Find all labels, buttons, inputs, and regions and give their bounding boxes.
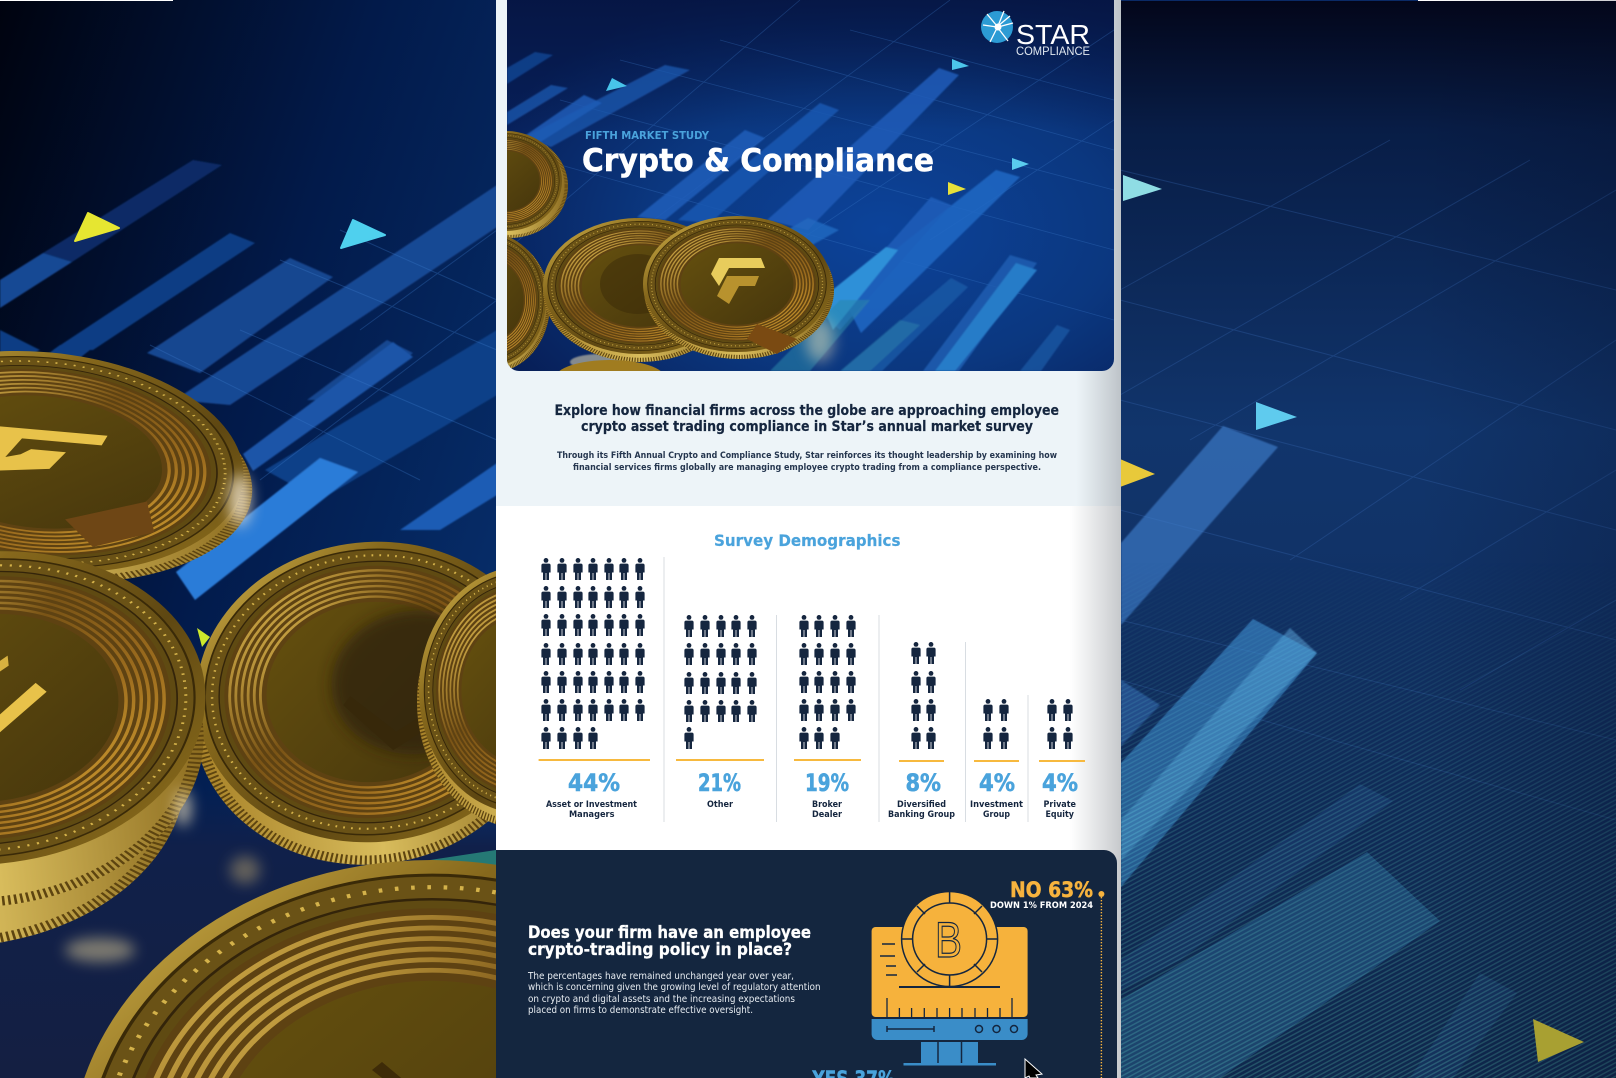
title block: FIFTH MARKET STUDY bbox=[585, 129, 710, 142]
intro heading bbox=[554, 403, 1059, 435]
column: investment group 4%: 4% bbox=[979, 769, 1015, 797]
column: investment group 4%: Group bbox=[983, 810, 1010, 820]
column: broker dealer 19% bbox=[794, 615, 861, 820]
column: investment group 4%: Investment bbox=[970, 800, 1024, 810]
column: diversified banking group 8% bbox=[888, 642, 955, 820]
coin: right small bbox=[417, 570, 496, 824]
callout: no 63%: DOWN 1% FROM 2024 bbox=[990, 901, 1093, 911]
column: broker dealer 19%: Broker bbox=[812, 800, 842, 810]
logo: Star Compliance: STAR bbox=[1016, 19, 1090, 50]
indicator: dotted line with dot bbox=[1098, 891, 1104, 1078]
coin: upper left bbox=[0, 351, 252, 580]
column: asset or investment managers 44% bbox=[539, 558, 650, 820]
panel: policy question bbox=[496, 850, 1117, 1078]
intro paragraph: financial services firms globally are managing employee crypto trading from a compliance perspective. bbox=[573, 463, 1041, 473]
hero coins bbox=[507, 131, 843, 371]
paragraph: policy commentary: which is concerning given the growing level of regulatory attention bbox=[528, 982, 820, 993]
title block bbox=[582, 129, 934, 179]
left background: gold coins bbox=[0, 351, 496, 1078]
glare: reflections under middle coin bbox=[65, 790, 260, 962]
glare: upper coin edge bbox=[229, 474, 251, 526]
column: diversified banking group 8%: Banking Group bbox=[888, 810, 955, 820]
hero chart bars bbox=[507, 52, 1070, 371]
icon: mouse cursor bbox=[1025, 1059, 1042, 1078]
panel: infographic page bbox=[496, 0, 1121, 1078]
title block: Crypto & Compliance bbox=[582, 143, 934, 179]
column: other 21%: Other bbox=[707, 800, 734, 810]
column: other 21%: 21% bbox=[698, 769, 741, 797]
intro paragraph: Through its Fifth Annual Crypto and Compliance Study, Star reinforces its thought leadership by examining how bbox=[557, 451, 1057, 461]
column: diversified banking group 8%: 8% bbox=[906, 769, 941, 797]
logo: Star Compliance bbox=[981, 11, 1090, 58]
column: asset or investment managers 44%: Managers bbox=[569, 810, 614, 820]
heading: policy question: Does your firm have an employee bbox=[528, 923, 811, 943]
chart: survey demographics pictogram bbox=[539, 557, 1085, 822]
icon: monitor with bitcoin coin: B bbox=[935, 912, 962, 968]
coin: bottom bbox=[84, 860, 496, 1078]
column: asset or investment managers 44%: Asset or Investment bbox=[546, 800, 638, 810]
column: diversified banking group 8%: Diversified bbox=[897, 800, 946, 810]
column: broker dealer 19%: Dealer bbox=[812, 810, 843, 820]
column: private equity 4%: Equity bbox=[1046, 810, 1074, 820]
paragraph: policy commentary: on crypto and digital assets and the increasing expectations bbox=[528, 994, 795, 1005]
paragraph: policy commentary bbox=[527, 971, 820, 1016]
column: investment group 4% bbox=[970, 699, 1024, 820]
right background: chart on dark blue bbox=[1120, 0, 1616, 1078]
left background: chart on dark blue bbox=[0, 0, 497, 1078]
heading: policy question: crypto-trading policy in place? bbox=[528, 940, 792, 960]
column: other 21% bbox=[676, 615, 764, 810]
coin: centre right back bbox=[200, 542, 488, 865]
intro paragraph bbox=[557, 451, 1057, 473]
heading: Survey Demographics: Survey Demographics bbox=[714, 531, 900, 550]
column: private equity 4% bbox=[1039, 699, 1085, 820]
callout: no 63% bbox=[990, 878, 1093, 911]
icon: star burst circle bbox=[981, 11, 1013, 43]
column: asset or investment managers 44%: 44% bbox=[568, 769, 620, 797]
callout: no 63%: NO 63% bbox=[1010, 878, 1093, 902]
coin: middle left bbox=[0, 551, 206, 942]
hero banner bbox=[507, 0, 1114, 371]
paragraph: policy commentary: The percentages have remained unchanged year over year, bbox=[527, 971, 794, 982]
column: private equity 4%: 4% bbox=[1042, 769, 1078, 797]
intro heading: Explore how financial firms across the globe are approaching employee bbox=[554, 403, 1059, 419]
paragraph: policy commentary: placed on firms to demonstrate effective oversight. bbox=[528, 1005, 753, 1016]
intro heading: crypto asset trading compliance in Star’s annual market survey bbox=[581, 419, 1033, 435]
heading: policy question bbox=[528, 923, 811, 960]
column: broker dealer 19%: 19% bbox=[805, 769, 849, 797]
hero triangles bbox=[606, 59, 1029, 195]
column: private equity 4%: Private bbox=[1044, 800, 1076, 810]
icon: monitor with bitcoin coin bbox=[872, 892, 1028, 1066]
logo: Star Compliance: COMPLIANCE bbox=[1016, 46, 1090, 58]
